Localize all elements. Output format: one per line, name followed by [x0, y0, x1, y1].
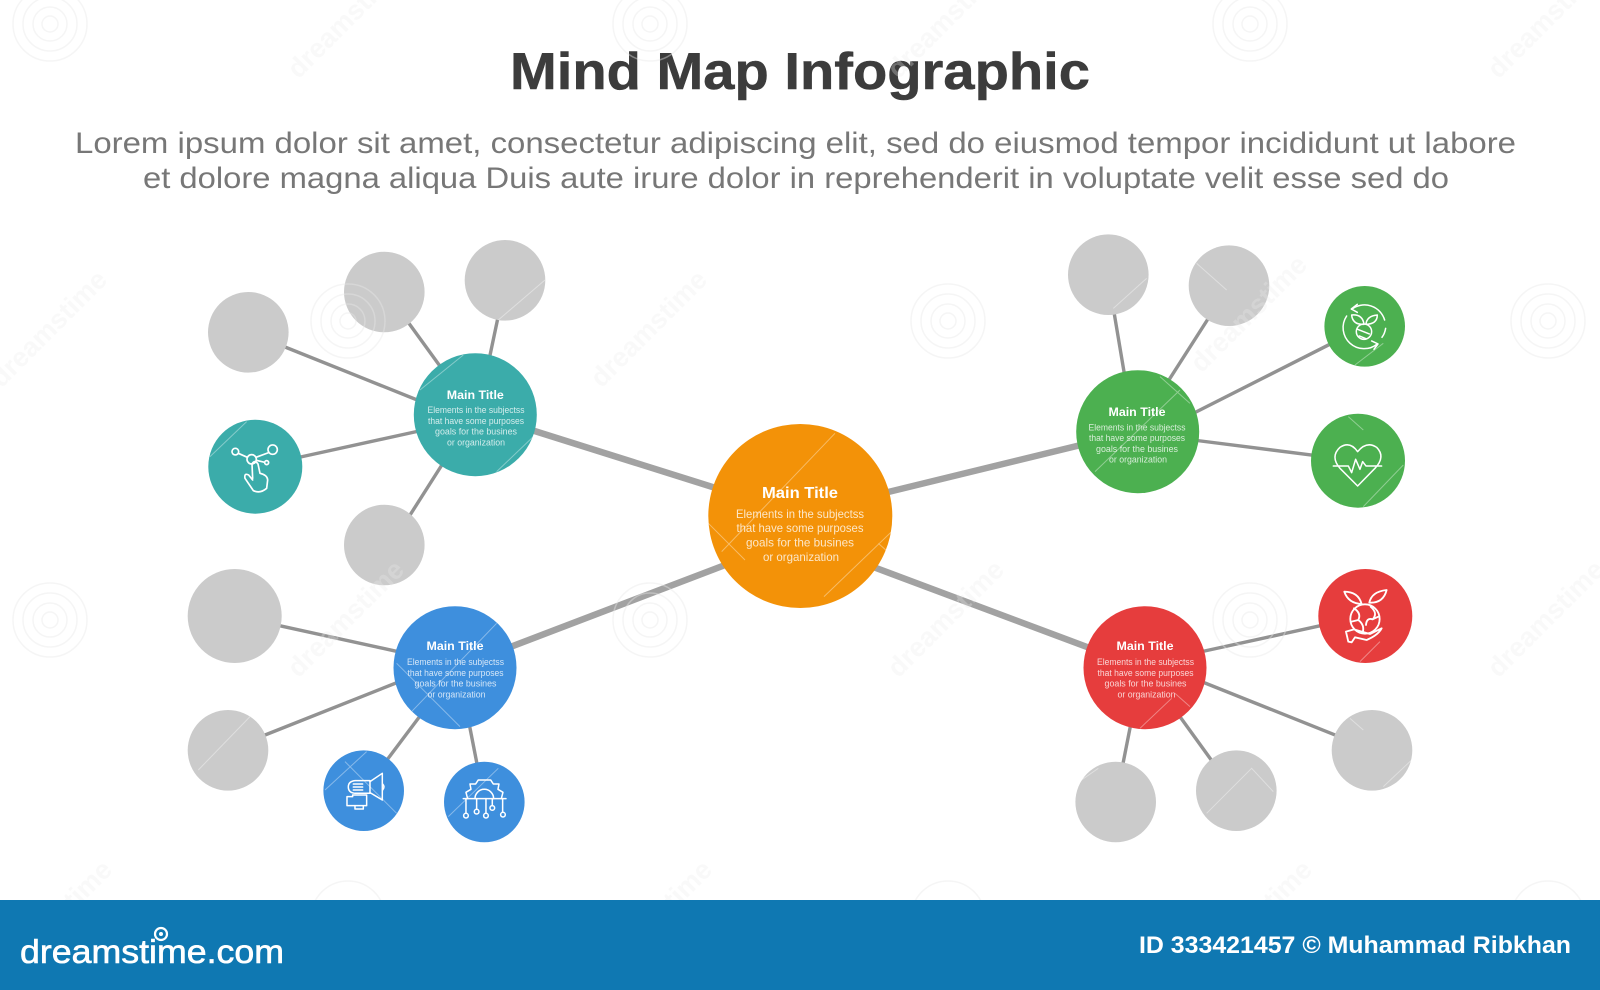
- connector lines from branches to leaf nodes: [260, 308, 1341, 769]
- blue main node: [394, 606, 516, 729]
- blue main node: Elements in the subjectss: [407, 657, 504, 667]
- icon: touch network: [208, 420, 302, 514]
- empty gray node: [344, 252, 425, 332]
- empty gray node: [1189, 245, 1269, 326]
- red main node: Main Title: [1116, 641, 1174, 653]
- watermark overlay: dreamstime: [584, 264, 713, 393]
- red branch: [1075, 569, 1412, 842]
- center node: goals for the busines: [746, 536, 854, 550]
- watermark overlay: dreamstime: [1189, 854, 1318, 983]
- green branch: [1068, 234, 1405, 508]
- empty gray node: [188, 569, 282, 663]
- image credit: ID 333421457 © Muhammad Ribkhan: [1139, 932, 1571, 959]
- red main node: Elements in the subjectss: [1097, 657, 1194, 667]
- blue main node: goals for the busines: [414, 678, 497, 688]
- center node: or organization: [763, 550, 839, 564]
- teal main node: or organization: [447, 438, 505, 448]
- green main node: or organization: [1109, 454, 1167, 464]
- logo: dreamstime.com: dreamstime.com: [20, 933, 284, 970]
- icon: gear circuit: [444, 762, 525, 842]
- blue main node: that have some purposes: [408, 668, 504, 678]
- teal main node: [414, 353, 537, 476]
- red main node: that have some purposes: [1098, 668, 1194, 678]
- empty gray node: [465, 240, 545, 321]
- center node: Elements in the subjectss: [736, 507, 864, 521]
- subtitle text: Lorem ipsum dolor sit amet, consectetur adipiscing elit, sed do eiusmod tempor incididunt ut labore: [75, 127, 1516, 160]
- green main node: Main Title: [1108, 407, 1166, 419]
- empty gray node: [208, 292, 289, 373]
- green main node: goals for the busines: [1096, 444, 1178, 454]
- watermark overlay: dreamstime: [281, 554, 410, 683]
- footer bar: [0, 900, 1600, 990]
- blue main node: or organization: [428, 690, 486, 700]
- green main node: [1076, 370, 1199, 493]
- red main node: goals for the busines: [1104, 678, 1187, 688]
- green main node: that have some purposes: [1089, 433, 1185, 443]
- teal main node: Elements in the subjectss: [428, 405, 525, 415]
- teal branch: [208, 240, 545, 585]
- center node: that have some purposes: [736, 521, 864, 535]
- empty gray node: [344, 505, 425, 585]
- watermark overlay: dreamstime: [589, 854, 718, 983]
- subtitle text: et dolore magna aliqua Duis aute irure dolor in reprehenderit in voluptate velit esse sed do: [143, 162, 1449, 195]
- empty gray node: [1196, 750, 1277, 831]
- icon: recycle earth: [1324, 286, 1405, 367]
- red main node: or organization: [1118, 690, 1176, 700]
- empty gray node: [1075, 762, 1156, 842]
- connector lines from center to the four branches: [505, 428, 1095, 650]
- red main node: [1084, 606, 1206, 729]
- icon: plant globe in hand: [1318, 569, 1412, 663]
- teal main node: goals for the busines: [435, 427, 517, 437]
- watermark overlay: dreamstime: [881, 554, 1010, 683]
- empty gray node: [1068, 234, 1149, 315]
- empty gray node: [1332, 710, 1412, 791]
- empty gray node: [188, 710, 268, 791]
- green main node: Elements in the subjectss: [1088, 422, 1186, 432]
- watermark overlay: dreamstime: [1184, 249, 1313, 378]
- icon: heart pulse: [1311, 414, 1405, 508]
- teal main node: Main Title: [447, 390, 504, 402]
- title: Mind Map Infographic: [510, 43, 1090, 101]
- icon: megaphone: [323, 750, 404, 831]
- blue main node: Main Title: [426, 641, 484, 653]
- center node: [708, 424, 892, 608]
- subtitle text: [75, 127, 1516, 195]
- center node: Main Title: [762, 485, 838, 502]
- teal main node: that have some purposes: [428, 416, 524, 426]
- blue branch: [188, 569, 525, 842]
